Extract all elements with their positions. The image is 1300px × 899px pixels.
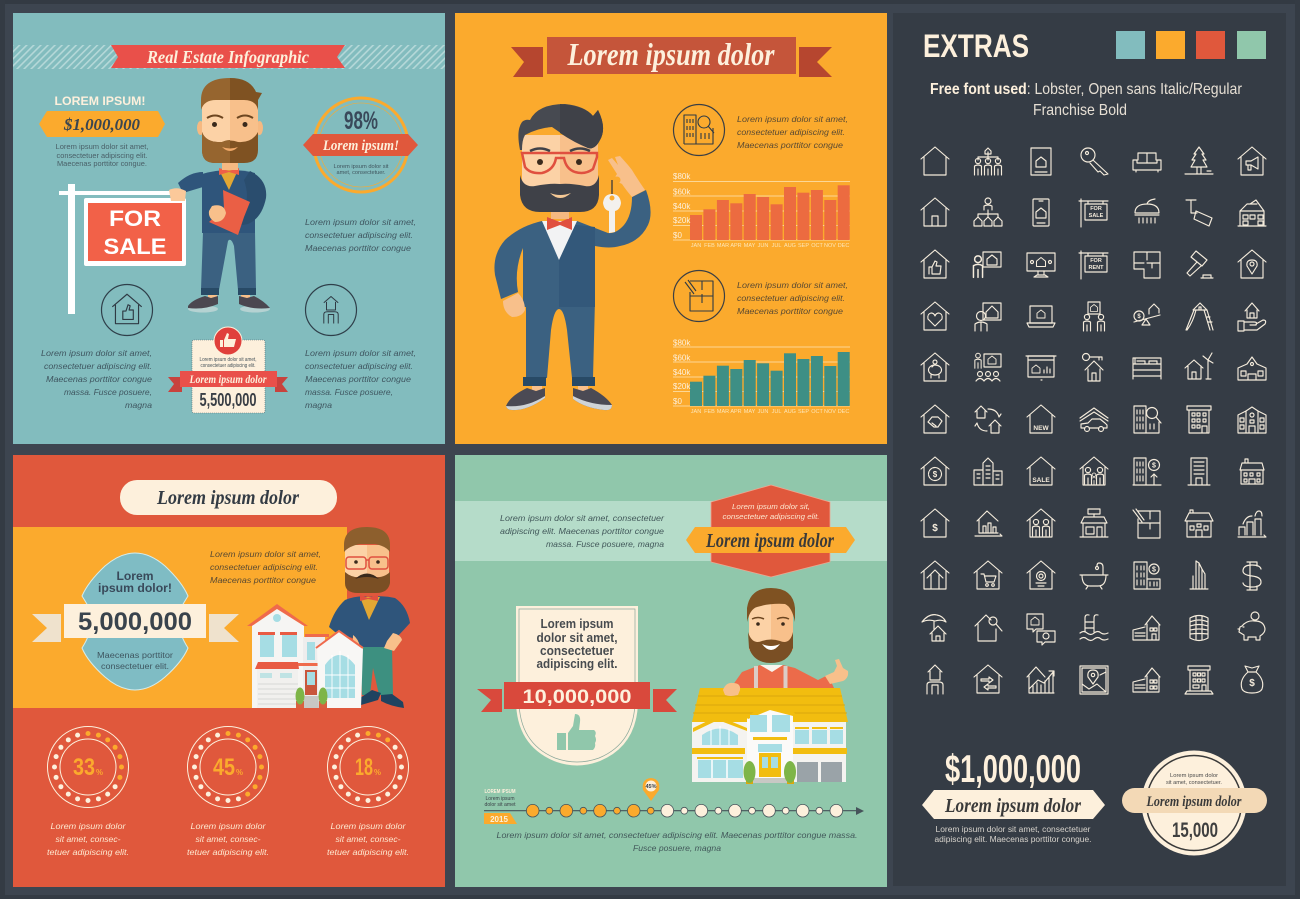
icon: sofa (1133, 153, 1161, 172)
text block: band paragraph (500, 513, 665, 549)
character: man holding sign (169, 78, 270, 312)
stat: $1,000,000: adipiscing elit. Maecenas porttitor congue. (934, 835, 1092, 844)
card: 5,500,000 (168, 327, 288, 413)
timeline: LOREM IPSUM (484, 789, 516, 795)
colour swatches (1116, 31, 1266, 59)
icon: office (1187, 406, 1211, 433)
text block: lower left paragraph: consectetuer adipiscing elit. (44, 361, 152, 371)
icon: house thumb (921, 250, 949, 278)
badge: 98%: Lorem ipsum dolor sit (334, 164, 389, 170)
panel: extras (893, 13, 1286, 886)
icon: house growth chart (1027, 667, 1054, 693)
text block: band paragraph: Lorem ipsum dolor sit amet, consectetuer (500, 513, 665, 523)
badge: hexagon heading: Lorem ipsum dolor sit, (732, 502, 810, 511)
stat: $1,000,000: LOREM IPSUM! (54, 96, 146, 108)
bar chart: teal: FEB (704, 409, 715, 415)
icon: bed (1133, 358, 1161, 379)
text block: lower right paragraph (305, 348, 416, 410)
icon: house piggy (921, 353, 949, 381)
icon: bathtub (1080, 563, 1108, 589)
icon: swimming pool (1080, 615, 1108, 640)
icon: couple with house (1084, 302, 1104, 331)
text block: timeline caption: Fusce posuere, magna (633, 843, 721, 853)
text block: donut captions: sit amet, consec- (336, 834, 401, 844)
shield: 10,000,000: dolor sit amet, (536, 631, 618, 645)
icon: agent with house board (975, 303, 1001, 331)
stat: $1,000,000 (39, 96, 165, 168)
text block: lower right paragraph: Lorem ipsum dolor sit amet, (305, 348, 416, 358)
icon: house (921, 147, 949, 175)
bar chart: teal: $0 (673, 397, 682, 406)
heading pill (120, 480, 337, 515)
icon: house with door (921, 198, 949, 226)
card: 5,500,000: consectetuer adipiscing elit. (200, 363, 256, 369)
donut: 45%: 45 (213, 754, 235, 781)
text block: second chart note: Maecenas porttitor congue (737, 306, 843, 316)
text block: donut captions: Lorem ipsum dolor (50, 821, 127, 831)
icon: team hierarchy (974, 148, 1002, 175)
icon: school (1238, 357, 1266, 380)
bar chart: teal: $20k (673, 382, 691, 391)
text block: band paragraph: consectetuer adipiscing elit. (210, 562, 318, 572)
icon: house dollar gear (921, 457, 949, 485)
text block: first chart note: consectetuer adipiscing elit. (737, 127, 845, 137)
text block: fonts used (930, 81, 1243, 119)
icon: projector screen (1026, 356, 1056, 380)
icon: manor (1238, 200, 1266, 226)
icon: building search (1134, 406, 1161, 433)
icon: laptop house (1027, 306, 1055, 327)
icon: shower (1135, 199, 1159, 223)
card: 5,500,000: 5,500,000 (200, 390, 256, 410)
icon: family house (1080, 457, 1108, 485)
banner heading (511, 36, 832, 77)
icon: tablet house (1031, 148, 1051, 175)
text block: band paragraph (210, 549, 321, 585)
text block: first chart note: Maecenas porttitor congue (737, 140, 843, 150)
icon: house cart (974, 561, 1002, 589)
bar chart: orange: DEC (838, 243, 849, 249)
icon: money bag (1241, 666, 1263, 693)
text block: donut captions: sit amet, consec- (56, 834, 121, 844)
heading pill: Lorem ipsum dolor (156, 487, 299, 509)
text block: right paragraph (305, 217, 416, 253)
donut: 18% (328, 726, 408, 808)
icon: building dollar annex: $ (1152, 566, 1156, 574)
icon: gavel (1187, 251, 1213, 278)
text block: fonts used: Free font used: Lobster, Open sans Italic/Regular (930, 81, 1243, 98)
icon: house search (975, 615, 1002, 641)
banner heading: Lorem ipsum dolor (567, 36, 775, 72)
donut: 45% (188, 726, 268, 808)
panel: real estate infographic (teal) (13, 13, 445, 444)
text block: first chart note (737, 114, 848, 150)
bar chart: teal: APR (730, 409, 742, 415)
bar chart: teal: $80k (673, 338, 691, 348)
icon: wide house (1185, 510, 1213, 537)
icon: house and garage small (1133, 668, 1160, 692)
text block: lower right paragraph: consectetuer adipiscing elit. (305, 361, 413, 371)
badge: 5,000,000: Maecenas porttitor (97, 651, 173, 660)
icon: speech bubbles (1027, 614, 1055, 645)
shield: 10,000,000: adipiscing elit. (536, 657, 618, 671)
badge: 15,000: Lorem ipsum dolor (1170, 773, 1218, 779)
timeline: dolor sit amet (484, 802, 516, 808)
shield: 10,000,000 (477, 606, 677, 766)
text block: donut captions: tetuer adipiscing elit. (187, 847, 269, 857)
title ribbon: Real Estate Infographic (146, 47, 309, 67)
bar chart: orange: OCT (811, 243, 823, 249)
icon: bars with arrow (1238, 511, 1266, 537)
panel: lorem ipsum dolor (red) (13, 455, 445, 887)
donut: 18%: % (374, 768, 381, 777)
icon: playground (1186, 303, 1213, 330)
bar chart: orange: MAY (744, 243, 756, 249)
bar chart: teal: JUN (758, 409, 768, 415)
icon: floor plan (1134, 252, 1160, 278)
donut: 33% (48, 726, 128, 808)
icon: person house head (927, 665, 943, 694)
bar chart: orange: JUL (772, 243, 781, 249)
bar chart: orange: JAN (691, 243, 701, 249)
bar chart: orange: NOV (824, 243, 836, 249)
icon: house badge (1027, 561, 1055, 589)
donut: 18%: 18 (355, 754, 373, 781)
bar chart: teal: MAR (717, 409, 729, 415)
icon: piggy bank (1238, 612, 1265, 640)
character: man with key (494, 104, 651, 410)
icon: key over house (1082, 354, 1103, 381)
icon: for rent sign: FOR (1090, 258, 1102, 264)
icon: house dollar: $ (932, 523, 938, 534)
stat: $1,000,000: Lorem ipsum dolor sit amet, consectetuer (936, 825, 1091, 834)
icon: new house: NEW (1033, 425, 1049, 432)
icon: new house (1027, 405, 1055, 433)
icon: scale house money: $ (1137, 314, 1141, 320)
bar chart: orange: AUG (784, 243, 796, 249)
badge: 98%: 98% (344, 107, 378, 135)
title ribbon (111, 45, 345, 68)
stat: $1,000,000: $1,000,000 (63, 115, 140, 134)
shield: 10,000,000: consectetuer (540, 644, 614, 658)
bar chart: orange: APR (730, 243, 742, 249)
text block: first chart note: Lorem ipsum dolor sit amet, (737, 114, 848, 124)
text block: fonts used: Franchise Bold (1033, 102, 1127, 119)
badge: 98%: Lorem ipsum! (322, 138, 399, 154)
text block: right paragraph: Lorem ipsum dolor sit amet, (305, 217, 416, 227)
badge: 5,000,000: 5,000,000 (78, 608, 192, 636)
badge: 15,000: sit amet, consectetuer. (1166, 780, 1222, 786)
for sale sign: FOR (109, 206, 161, 231)
icon: city (974, 458, 1002, 485)
bar chart: teal: OCT (811, 409, 823, 415)
bar chart: teal: JAN (691, 409, 701, 415)
icon grid (921, 147, 1266, 694)
bar chart: teal: $60k (673, 354, 691, 362)
bar chart: teal: NOV (824, 409, 836, 415)
text block: donut captions: sit amet, consec- (196, 834, 261, 844)
text block: donut captions: Lorem ipsum dolor (190, 821, 267, 831)
text block: band paragraph: adipiscing elit. Maecenas porttitor congue (500, 526, 664, 536)
for sale sign (59, 184, 186, 314)
text block: lower right paragraph: magna (305, 400, 332, 410)
panel: lorem ipsum dolor (orange) (455, 13, 887, 444)
icon: for sale sign: FOR (1090, 206, 1102, 212)
icon: org chart of houses (974, 198, 1002, 226)
text block: band paragraph: massa. Fusce posuere, magna (546, 539, 664, 549)
shield: 10,000,000: Lorem ipsum (540, 617, 614, 631)
text block: lower left paragraph: Maecenas porttitor congue (46, 374, 152, 384)
timeline (484, 778, 864, 824)
badge: 5,000,000 (32, 553, 239, 690)
stat: $1,000,000: Maecenas porttitor congue. (57, 159, 147, 168)
stat: $1,000,000 (922, 748, 1105, 844)
panel: lorem ipsum dolor (green) (455, 455, 887, 887)
bar chart: orange: FEB (704, 243, 715, 249)
bar chart: orange: $20k (673, 216, 691, 225)
text block: band paragraph: Maecenas porttitor congue (210, 575, 316, 585)
bar chart: teal: JUL (772, 409, 781, 415)
icon: person with house head (306, 284, 356, 336)
badge: 15,000: Lorem ipsum dolor (1146, 794, 1242, 810)
light band (455, 501, 887, 561)
icon: house exchange (975, 406, 1001, 433)
icon: building dollar up (1133, 458, 1161, 485)
icon: hand holding house (1238, 303, 1266, 331)
stat: $1,000,000: consectetuer adipiscing elit. (56, 151, 148, 160)
badge: hexagon heading: consectetuer adipiscing elit. (722, 512, 820, 521)
bar chart: orange (673, 172, 850, 249)
icon: security camera (1186, 200, 1212, 226)
text block: donut captions (47, 821, 409, 857)
text block: lower left paragraph: magna (125, 400, 152, 410)
bar chart: orange: MAR (717, 243, 729, 249)
bar chart: orange: $40k (673, 202, 691, 211)
icon: for rent sign: RENT (1089, 265, 1104, 271)
icon: floor plan pencil (1133, 509, 1160, 538)
icon: house handshake (921, 405, 949, 433)
donut: 45%: % (236, 768, 243, 777)
donut: 33%: 33 (73, 754, 95, 781)
icon: mansion (1238, 407, 1266, 433)
icon: for sale sign (1079, 199, 1108, 227)
text block: lower right paragraph: massa. Fusce posuere, (305, 387, 393, 397)
heading: extras: EXTRAS (923, 28, 1029, 64)
badge: 5,000,000: consectetuer elit. (101, 662, 169, 671)
timeline: 2015 (490, 815, 508, 824)
text block: lower left paragraph: massa. Fusce posuere, (64, 387, 152, 397)
character: man with thumb up (730, 588, 848, 689)
icon: dollar (1243, 562, 1261, 590)
stat: $1,000,000: Lorem ipsum dolor sit amet, (56, 142, 148, 151)
donut: 33%: % (96, 768, 103, 777)
bar chart: teal: SEP (798, 409, 809, 415)
badge: 15,000 (1122, 750, 1267, 856)
badge: 15,000: 15,000 (1172, 819, 1218, 842)
bar chart: teal: MAY (744, 409, 756, 415)
badge: hexagon heading: Lorem ipsum dolor (705, 530, 834, 552)
icon: map pin (1080, 666, 1108, 694)
text block: band paragraph: Lorem ipsum dolor sit amet, (210, 549, 321, 559)
icon: tower block (1188, 458, 1210, 485)
text block: second chart note (737, 280, 848, 316)
icon: house pin (1238, 250, 1266, 278)
icon: key (1081, 148, 1108, 175)
icon: house sale (1027, 457, 1055, 485)
icon: money bag: $ (1249, 678, 1255, 689)
bar chart: orange: $60k (673, 188, 691, 196)
icon: house and garage (1133, 616, 1160, 640)
icon: house sale: SALE (1032, 477, 1050, 484)
icon: house swap arrows (974, 665, 1002, 693)
card: 5,500,000: Lorem ipsum dolor sit amet, (200, 357, 256, 363)
text block: lower left paragraph: Lorem ipsum dolor sit amet, (41, 348, 152, 358)
icon: townhouse (1240, 459, 1264, 484)
bar chart: orange: JUN (758, 243, 768, 249)
icon: house arrow (921, 561, 949, 589)
bar chart: orange: $80k (673, 172, 691, 181)
bar chart: teal: $40k (673, 368, 691, 377)
badge: hexagon heading (686, 485, 855, 577)
bar chart: orange: $0 (673, 231, 682, 240)
badge: 98% (303, 98, 418, 192)
badge: 5,000,000: Lorem (116, 571, 154, 583)
icon: garage car (1080, 408, 1108, 432)
icon: monitor house (1027, 253, 1055, 277)
text block: donut captions: tetuer adipiscing elit. (47, 847, 129, 857)
illustration: white house (247, 604, 363, 708)
text block: lower left paragraph (41, 348, 152, 410)
text block: timeline caption: Lorem ipsum dolor sit amet, consectetuer adipiscing elit. Maecenas porttitor congue massa. (496, 830, 858, 840)
icon: couple house (1027, 509, 1055, 537)
orange band (13, 527, 347, 708)
icon: house chart (975, 511, 1002, 536)
text block: right paragraph: Maecenas porttitor congue (305, 243, 411, 253)
timeline: Lorem ipsum (486, 796, 515, 802)
icon: building search (674, 104, 724, 156)
icon: skyscraper (1190, 561, 1208, 589)
icon: office building (1185, 666, 1213, 694)
badge: 5,000,000: ipsum dolor! (98, 583, 172, 595)
bar chart: teal (673, 338, 850, 415)
illustration: yellow house (692, 683, 848, 784)
icon: floor plan (674, 270, 724, 322)
icon: scale house money (1134, 304, 1160, 325)
icon: house heart (921, 302, 949, 330)
bar chart: orange: SEP (798, 243, 809, 249)
text block: lower right paragraph: Maecenas porttitor congue (305, 374, 411, 384)
stat: $1,000,000: Lorem ipsum dolor (944, 795, 1081, 817)
icon: shop (1080, 509, 1108, 537)
for sale sign: SALE (104, 234, 166, 259)
icon: house dollar (921, 509, 949, 537)
timeline: 45% (645, 784, 657, 790)
icon: round tower (1190, 616, 1208, 640)
text block: second chart note: Lorem ipsum dolor sit amet, (737, 280, 848, 290)
text block: second chart note: consectetuer adipiscing elit. (737, 293, 845, 303)
icon: house dollar gear: $ (933, 470, 938, 479)
text block: timeline caption (496, 830, 858, 853)
icon: person at board (973, 252, 1001, 277)
icon: presentation audience (975, 353, 1001, 381)
bar chart: teal: AUG (784, 409, 796, 415)
character: man with glasses (329, 527, 410, 708)
icon: for rent sign (1079, 251, 1108, 279)
icon: umbrella house (922, 615, 946, 641)
text block: right paragraph: consectetuer adipiscing elit. (305, 230, 413, 240)
icon: house with thumb (102, 284, 152, 336)
icon: tree (1185, 147, 1213, 174)
text block: donut captions: tetuer adipiscing elit. (327, 847, 409, 857)
text block: donut captions: Lorem ipsum dolor (330, 821, 407, 831)
bar chart: teal: DEC (838, 409, 849, 415)
icon: house megaphone (1238, 147, 1266, 175)
stat: $1,000,000: $1,000,000 (945, 748, 1081, 791)
icon: for sale sign: SALE (1089, 213, 1104, 219)
icon: building dollar annex (1134, 562, 1160, 589)
icon: house wind turbine (1185, 353, 1213, 379)
icon: building dollar up: $ (1152, 462, 1156, 470)
icon: smartphone house (1033, 199, 1049, 226)
card: 5,500,000: Lorem ipsum dolor (189, 372, 267, 386)
badge: 98%: amet, consectetuer. (336, 170, 386, 176)
shield: 10,000,000: 10,000,000 (522, 687, 632, 708)
